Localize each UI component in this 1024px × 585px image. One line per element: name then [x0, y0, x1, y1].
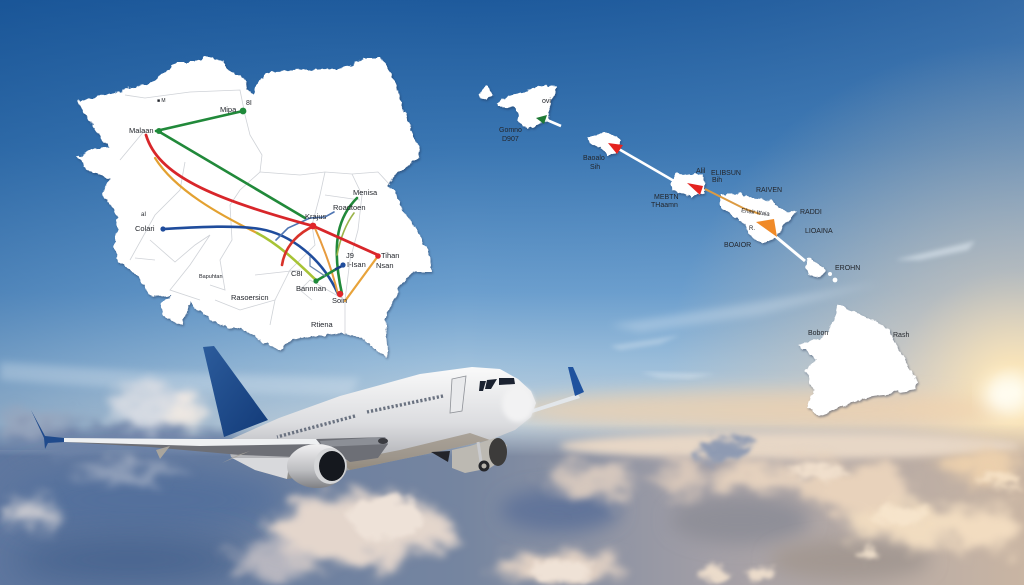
map labels: Colari	[135, 224, 155, 233]
fuselage	[227, 367, 536, 479]
island labels: Ehair Ittaia	[741, 208, 771, 218]
map labels: Bannnan	[296, 284, 326, 293]
cabin door	[450, 376, 466, 413]
cloud bank	[0, 388, 1024, 585]
route lines	[146, 111, 378, 301]
map labels: aI	[141, 212, 146, 218]
nose highlight	[502, 386, 534, 422]
island labels: D907	[502, 136, 519, 143]
near wing	[64, 437, 388, 479]
route nodes	[156, 108, 381, 297]
wingtip	[31, 410, 64, 449]
map labels: Malaan	[129, 126, 154, 135]
map labels: Mipa	[220, 105, 237, 114]
island labels: ovi	[542, 98, 551, 105]
island labels: EROHN	[835, 265, 860, 272]
island labels: Alil	[696, 168, 706, 175]
island labels: RAIVEN	[756, 187, 782, 194]
map labels: Bapuhtan	[199, 274, 223, 280]
island labels: Sih	[590, 164, 600, 171]
island labels: MEBTN	[654, 194, 678, 201]
white connector lines	[547, 120, 805, 261]
cloud dark shading	[10, 466, 930, 584]
island labels: THaamn	[651, 202, 678, 209]
map labels: Roadtoen	[333, 203, 366, 212]
far wing and winglet	[530, 367, 584, 413]
map labels: Krajus	[305, 212, 327, 221]
map labels: Menisa	[353, 188, 378, 197]
arrow: green	[536, 115, 547, 124]
island labels: BOAIOR	[724, 242, 751, 249]
cloud horizon band	[560, 433, 1020, 459]
panel: main route map	[76, 57, 432, 358]
island labels: LIOAINA	[805, 228, 833, 235]
cockpit windows	[479, 378, 515, 391]
cloud lit puffs	[2, 451, 1023, 584]
island labels: Bobon	[808, 330, 828, 337]
tail fin	[203, 346, 268, 437]
cloud small highlights	[347, 439, 1022, 582]
cloud base layer	[0, 424, 1024, 585]
wispy high clouds	[0, 241, 1024, 430]
small islets	[828, 272, 837, 282]
cloud upper edge	[2, 388, 230, 454]
island labels: Gomno	[499, 127, 522, 134]
map labels: Soin	[332, 296, 347, 305]
arrow: red lower	[687, 183, 703, 195]
fuselage underside	[340, 433, 490, 470]
map labels: Tihan	[381, 251, 399, 260]
panel: island chain	[480, 84, 918, 415]
map labels: Nsan	[376, 261, 394, 270]
island labels: R.	[749, 226, 755, 232]
island labels	[499, 98, 909, 339]
island labels: RADDI	[800, 209, 822, 216]
map labels: Rtiena	[311, 320, 334, 329]
map region borders	[120, 90, 390, 335]
map labels: Rasoersicn	[231, 293, 269, 302]
island labels: Rash	[893, 332, 909, 339]
route connector: orange	[705, 189, 760, 214]
map labels: C8I	[291, 269, 303, 278]
map labels: 8I	[246, 100, 252, 107]
airplane	[31, 346, 584, 488]
map landmass	[76, 57, 432, 358]
passenger windows	[277, 396, 443, 437]
arrow: orange	[756, 219, 777, 237]
island labels: Bih	[712, 177, 722, 184]
arrow: red upper	[608, 143, 623, 154]
far engine and gear	[431, 438, 507, 473]
island labels: Baoalo	[583, 155, 605, 162]
island chain landmasses	[480, 84, 918, 415]
map labels	[129, 98, 399, 329]
near engine	[287, 444, 347, 488]
island labels: ELIBSUN	[711, 170, 741, 177]
map labels: J9	[346, 251, 354, 260]
map labels: I-Isan	[347, 260, 366, 269]
map labels: ■ M	[157, 98, 166, 104]
